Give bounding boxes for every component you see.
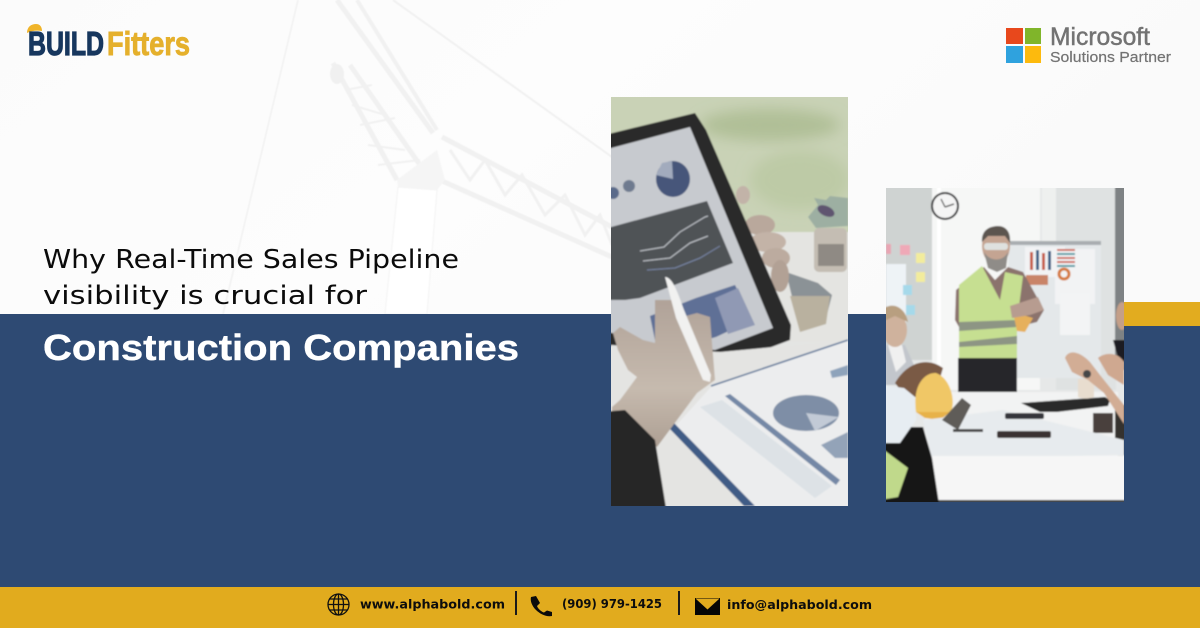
logo: Microsoft Solutions Partner: Microsoft bbox=[1050, 23, 1150, 51]
title bbox=[43, 245, 519, 368]
background panel bbox=[0, 0, 1200, 320]
icon: globe bbox=[328, 594, 349, 615]
gold accent block bbox=[1124, 302, 1200, 326]
title: visibility is crucial for bbox=[43, 281, 368, 311]
icon: envelope bbox=[695, 598, 720, 615]
contact: phone: (909) 979-1425 bbox=[562, 596, 662, 611]
faded crane background bbox=[223, 0, 612, 314]
logo: BuildFitters: BUILD bbox=[28, 25, 104, 62]
logo: BuildFitters: Fitters bbox=[107, 25, 190, 62]
title: Why Real-Time Sales Pipeline bbox=[43, 245, 459, 275]
divider bbox=[678, 591, 680, 615]
blue band bbox=[0, 314, 1200, 587]
photo: tablet with charts bbox=[611, 97, 848, 506]
photo: team meeting bbox=[886, 188, 1124, 502]
footer bar bbox=[0, 587, 1200, 628]
logo: BuildFitters bbox=[27, 24, 190, 62]
contact: email: info@alphabold.com bbox=[727, 597, 872, 612]
logo: Microsoft Solutions Partner: Solutions Partner bbox=[1050, 50, 1171, 66]
icon: phone bbox=[531, 596, 552, 616]
divider bbox=[515, 591, 517, 615]
contact: website: www.alphabold.com bbox=[360, 596, 505, 612]
title: Construction Companies bbox=[43, 327, 519, 368]
logo: Microsoft Solutions Partner bbox=[1006, 23, 1171, 66]
